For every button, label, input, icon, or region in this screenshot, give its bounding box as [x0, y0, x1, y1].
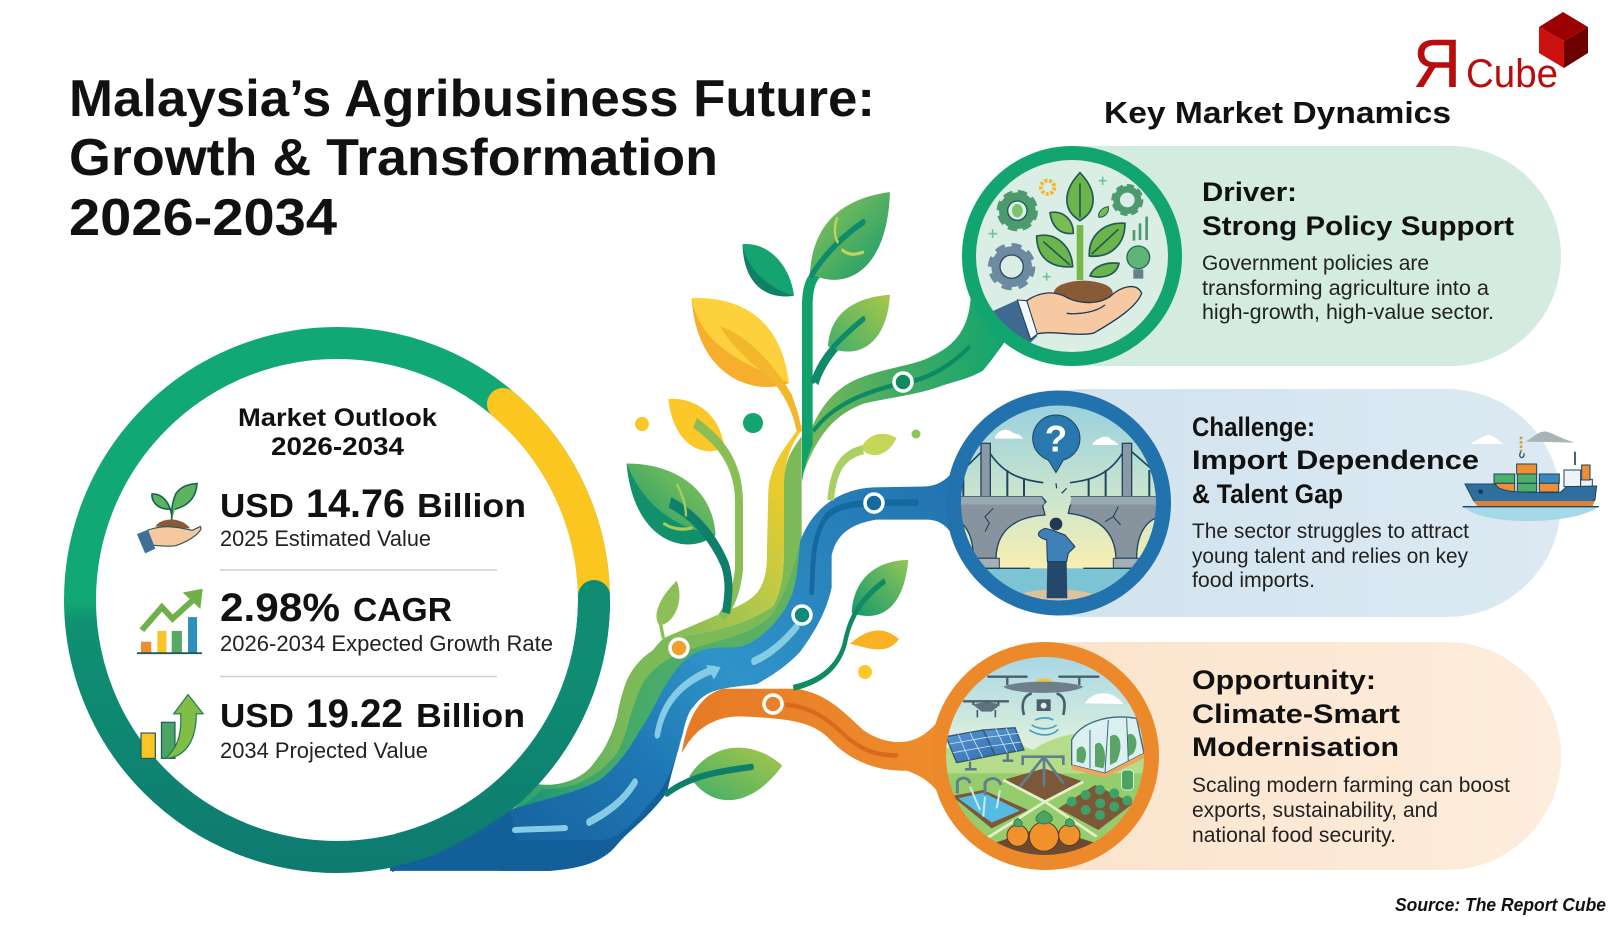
title: 2026-2034 [69, 189, 337, 247]
leaf: bottom [667, 748, 782, 800]
text block: opportunity: Modernisation [1192, 732, 1399, 762]
stem: main green stem [802, 268, 827, 482]
text block: opportunity: Scaling modern farming can boost [1192, 774, 1510, 797]
icon: rising bars and arrow [141, 695, 203, 758]
stat: 2025 value: Billion [417, 487, 526, 524]
text block: opportunity [1192, 665, 1510, 847]
leaf: teal [743, 244, 794, 296]
stat: CAGR: 2.98% [220, 586, 340, 630]
stat: 2034 value: Billion [416, 697, 525, 734]
stat: 2025 value: USD [220, 487, 294, 524]
logo: RCube: Я [1413, 26, 1461, 102]
leaf: lime right [831, 434, 897, 500]
connector: opportunity [682, 689, 940, 795]
text block: challenge: Import Dependence [1192, 445, 1479, 475]
stat: CAGR [220, 586, 553, 656]
logo: RCube [1413, 12, 1588, 102]
title: Growth & Transformation [69, 129, 718, 187]
tree of connectors and leaves [390, 192, 1005, 871]
leaf: small yellow [668, 399, 739, 618]
branch: driver connector [802, 298, 1005, 477]
stat: CAGR: 2026-2034 Expected Growth Rate [220, 631, 553, 656]
text block: challenge [1192, 412, 1479, 592]
panel: opportunity [938, 642, 1561, 870]
icon: circle medallion hand and plant [976, 172, 1150, 342]
branch: outer green band [510, 436, 802, 813]
panel: driver [969, 146, 1561, 366]
icon: hand with seedling [137, 484, 201, 553]
stat: 2025 value [220, 482, 526, 551]
panel: market outlook text [220, 404, 553, 763]
text block: opportunity: Climate-Smart [1192, 699, 1400, 729]
heading: key market dynamics: Key Market Dynamics [1104, 95, 1451, 130]
stat: 2034 value: USD [220, 697, 294, 734]
connector nodes [670, 373, 912, 713]
river junction over the ring [392, 809, 565, 872]
arrows: river flow marks [589, 627, 797, 822]
text block: opportunity: Opportunity: [1192, 665, 1376, 695]
leaf: large left green [627, 463, 729, 613]
text block: driver: Government policies are [1202, 252, 1429, 275]
text block: driver [1202, 177, 1514, 324]
text block: driver: Strong Policy Support [1202, 211, 1514, 241]
icon: circle medallion broken bridge [961, 406, 1156, 600]
panel: challenge [950, 389, 1599, 617]
title: Malaysia’s Agribusiness Future: [69, 70, 875, 128]
stat: 2034 value [220, 692, 525, 763]
leaf: bud [656, 581, 679, 638]
ring [938, 650, 1152, 862]
branch: inner green band [510, 542, 800, 818]
text block: challenge: food imports. [1192, 569, 1315, 592]
heading: market outlook: 2026-2034 [271, 433, 404, 461]
leaf: small orange [850, 630, 899, 649]
river: dark lower band [390, 723, 687, 871]
icon: circle medallion smart farm [946, 657, 1144, 855]
stat: 2025 value: 14.76 [306, 482, 405, 526]
ring [954, 398, 1164, 608]
stat: 2034 value: 2034 Projected Value [220, 738, 428, 763]
panel: market outlook ring [80, 343, 594, 857]
source note: Source: The Report Cube [1395, 895, 1606, 915]
pill background [980, 146, 1561, 366]
text block: challenge: & Talent Gap [1192, 479, 1343, 509]
stat: 2025 value: 2025 Estimated Value [220, 526, 431, 551]
text block: opportunity: national food security. [1192, 824, 1396, 847]
heading: market outlook: Market Outlook [238, 404, 437, 432]
branch: yellow band [663, 424, 802, 638]
stat: 2034 value: 19.22 [306, 692, 403, 736]
heading: market outlook [238, 404, 437, 461]
text block: challenge: Challenge: [1192, 412, 1315, 442]
text block: challenge: The sector struggles to attract [1192, 520, 1469, 543]
pill background [960, 642, 1561, 870]
stat: CAGR: CAGR [353, 591, 452, 628]
icon: circle medallion broken bridge: ? [1045, 419, 1067, 460]
leaf: large yellow [692, 298, 802, 431]
text block: driver: transforming agriculture into a [1202, 277, 1489, 300]
logo: RCube: Cube [1466, 52, 1558, 96]
connector: challenge river [500, 468, 955, 871]
title [69, 70, 875, 247]
ring [969, 153, 1175, 359]
text block: challenge: young talent and relies on key [1192, 545, 1468, 568]
icon: cargo ship [1463, 431, 1599, 521]
text block: driver: high-growth, high-value sector. [1202, 301, 1494, 324]
leaf: mid right [813, 295, 890, 381]
leaf: top right [810, 192, 890, 280]
pill background [970, 389, 1561, 617]
decorative dots [635, 413, 920, 679]
text block: driver: Driver: [1202, 177, 1297, 207]
text block: opportunity: exports, sustainability, and [1192, 799, 1438, 822]
leaf: mid green [793, 560, 908, 688]
icon: growth chart [137, 589, 203, 653]
